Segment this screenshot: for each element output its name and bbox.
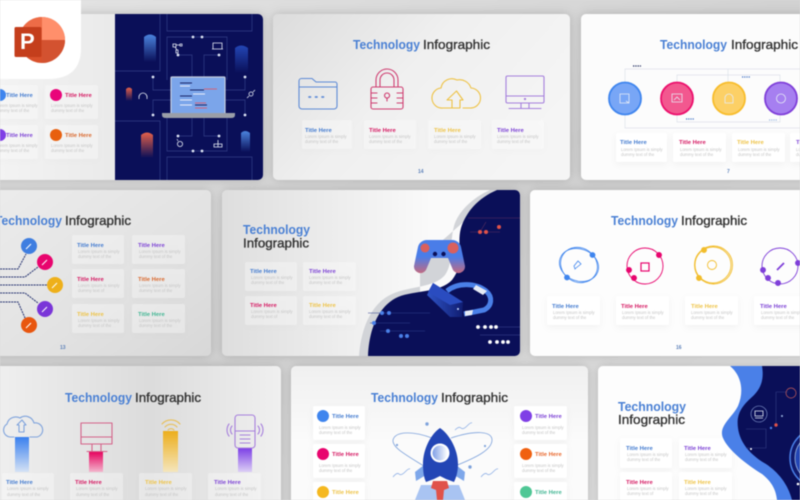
card: pink: dummy text of: [78, 288, 105, 293]
icon: yellow orbit: [694, 246, 732, 284]
title: Technology: [243, 222, 311, 237]
icon: blue orbit: [554, 240, 604, 290]
card: blue: [72, 235, 124, 264]
card: folder: Title Here: [305, 128, 332, 134]
card: padlock: Lorem Ipsum is simply: [369, 134, 412, 139]
card: green: [514, 482, 567, 500]
card: pink: dummy text of: [251, 314, 278, 319]
card: title 1: [0, 85, 39, 119]
card: blue: [547, 296, 600, 325]
card: pink: Lorem Ipsum is simply: [78, 283, 121, 288]
panel: rocket slide: [291, 366, 588, 500]
title: Technology: [611, 213, 679, 228]
navy wave shape: [359, 190, 520, 356]
title: Technology: [618, 399, 687, 414]
card: folder: Lorem Ipsum is simply: [305, 134, 348, 139]
card: orange: dummy text of the: [522, 468, 556, 473]
card: pink: [72, 269, 124, 298]
card: purple: [679, 438, 732, 468]
card: blue: Lorem Ipsum is simply: [553, 310, 596, 315]
card: blue: Title Here: [620, 140, 647, 146]
dashed connectors: [0, 254, 47, 318]
card: yellow: dummy text of the: [685, 491, 719, 496]
card: yellow: [72, 304, 124, 333]
card: yellow: dummy text of the: [691, 315, 725, 320]
card: blue: Title Here: [552, 304, 579, 310]
card: pink: Lorem Ipsum is simply: [319, 463, 362, 468]
card: pink: Lorem Ipsum is simply: [251, 309, 294, 314]
title: Technology: [660, 37, 728, 52]
card: title 3: [0, 125, 39, 159]
card: pink: Title Here: [75, 480, 102, 486]
card: teal: Lorem Ipsum is simply: [139, 318, 182, 323]
card: orange: Title Here: [138, 277, 165, 283]
card: pink: dummy text of: [627, 491, 654, 496]
card: blue: dummy text of the: [621, 152, 655, 157]
page number: 16: [676, 345, 682, 351]
title: Infographic: [135, 390, 202, 405]
card: yellow: Lorem Ipsum is simply: [78, 318, 121, 323]
card: purple: dummy text of the: [309, 280, 343, 285]
laptop: [162, 77, 235, 118]
card: yellow: [313, 482, 365, 500]
card: pink: Lorem Ipsum is simply: [622, 310, 665, 315]
title: [660, 37, 799, 52]
card: pink: Title Here: [621, 304, 648, 310]
card: pink: Title Here: [626, 480, 653, 486]
icon: folder: [299, 78, 337, 109]
card: title 2: Lorem Ipsum is simply: [51, 103, 94, 108]
rocket illustration: [393, 422, 498, 500]
card: blue: dummy text of the: [7, 492, 41, 497]
card: yellow: Lorem Ipsum is simply: [691, 310, 734, 315]
card: pink: Title Here: [250, 303, 277, 309]
card: title 1: Title Here: [6, 93, 33, 99]
card: yellow: [139, 473, 192, 500]
card: yellow: [303, 296, 356, 325]
card: purple: Title Here: [684, 446, 711, 452]
card: purple: dummy text of the: [522, 430, 556, 435]
card: orange: Lorem Ipsum is simply: [522, 463, 565, 468]
card: title 4: dummy text of the: [51, 148, 85, 153]
icon: pink orbit: [626, 248, 663, 284]
card: blue: [620, 438, 672, 468]
card: orange: dummy text of the: [139, 288, 173, 293]
card: yellow: Title Here: [691, 304, 718, 310]
card: purple: Lorem Ipsum is simply: [309, 275, 352, 280]
card: purple: Lorem Ipsum is simply: [685, 452, 728, 457]
panel: laptop slide: [0, 14, 263, 180]
card: yellow: [685, 296, 738, 325]
column: pink monitor: [81, 423, 112, 472]
card: blue: [313, 406, 365, 440]
card: pink: Lorem Ipsum is simply: [680, 147, 723, 152]
title: Infographic: [441, 390, 509, 405]
title: [618, 399, 687, 427]
title: [0, 213, 132, 228]
card: pink: Lorem Ipsum is simply: [76, 486, 119, 491]
card: pink: [620, 472, 672, 500]
card: purple: [514, 406, 567, 440]
title: [243, 222, 311, 250]
card: yellow: Title Here: [684, 480, 711, 486]
card: yellow: dummy text of the: [78, 323, 112, 328]
card: purple: Lorem Ipsum is simply: [139, 249, 182, 254]
card: purple: Title Here: [138, 243, 165, 249]
card: title 3: Title Here: [6, 133, 33, 139]
card: blue: [616, 133, 667, 162]
card: pink: [313, 444, 365, 478]
card: teal: [132, 304, 185, 333]
panel: security icons slide: [273, 14, 570, 180]
blue and navy wave: [722, 366, 800, 500]
card: orange: Title Here: [535, 452, 562, 458]
card: blue: [245, 262, 297, 291]
card: monitor: [492, 120, 544, 149]
page number: 7: [727, 169, 730, 175]
panel: device columns slide: [0, 366, 281, 500]
card: cloud: Title Here: [434, 128, 461, 134]
card: purple: Title Here: [535, 414, 562, 420]
card: blue: dummy text of the: [251, 280, 285, 285]
navy circuit area: [115, 14, 263, 180]
panel: orbit circles slide: [530, 190, 800, 356]
card: yellow: Lorem Ipsum is simply: [738, 147, 781, 152]
icon: cloud upload: [432, 79, 481, 108]
card: pink: [70, 473, 123, 500]
card: yellow: Lorem Ipsum is simply: [145, 486, 188, 491]
icon: game controller: [414, 240, 465, 273]
connector lines: [625, 66, 800, 128]
card: purple: Lorem Ipsum is simply: [215, 486, 258, 491]
card: yellow: [679, 472, 732, 500]
node: yellow: [713, 82, 745, 114]
column: blue cloud: [4, 416, 43, 472]
PowerPoint logo badge: P: [20, 29, 35, 54]
title: [353, 37, 491, 52]
card: yellow: dummy text of the: [145, 492, 179, 497]
icon: VR headset: [427, 283, 491, 317]
panel: dashed connector slide: [0, 190, 211, 356]
title: [371, 390, 509, 405]
card: title 2: dummy text of the: [51, 108, 85, 113]
card: title 4: [45, 125, 98, 159]
card: purple: Lorem Ipsum is simply: [522, 425, 565, 430]
title: Technology: [65, 390, 133, 405]
card: pink: [673, 133, 726, 162]
card: orange: [132, 269, 185, 298]
card: title 4: Title Here: [65, 133, 92, 139]
glowing cylinders: [126, 34, 250, 158]
card: yellow: dummy text of the: [309, 314, 343, 319]
card: blue: [2, 473, 54, 500]
card: title 2: Title Here: [65, 93, 92, 99]
card: yellow: dummy text of the: [738, 152, 772, 157]
card: yellow: Lorem Ipsum is simply: [309, 309, 352, 314]
card: blue: Lorem Ipsum is simply: [319, 425, 362, 430]
card: blue: Lorem Ipsum is simply: [251, 275, 294, 280]
icon: monitor: [506, 76, 544, 108]
card: purple: [790, 133, 800, 162]
title: [611, 213, 748, 228]
card: teal: Title Here: [138, 312, 165, 318]
title: Infographic: [423, 37, 491, 52]
card: blue: Title Here: [332, 414, 359, 420]
title: [65, 390, 202, 405]
card: padlock: [364, 120, 416, 149]
card: blue: Lorem Ipsum is simply: [621, 147, 664, 152]
page number: 13: [60, 345, 66, 351]
card: purple: dummy text of the: [685, 457, 719, 462]
card: pink: Title Here: [332, 452, 359, 458]
card: yellow: Title Here: [145, 480, 172, 486]
card: yellow: Lorem Ipsum is simply: [685, 486, 728, 491]
card: purple: [208, 473, 261, 500]
panel: circle process slide: [581, 14, 800, 180]
card: purple: dummy text of the: [215, 492, 249, 497]
card: monitor: dummy text of the: [497, 139, 531, 144]
PowerPoint logo badge: [0, 0, 81, 79]
card: orange: Lorem Ipsum is simply: [139, 283, 182, 288]
title: Technology: [353, 37, 421, 52]
card: pink: dummy text of the: [622, 315, 656, 320]
card: yellow: [732, 133, 785, 162]
card: pink: dummy text of the: [680, 152, 714, 157]
card: blue: dummy text of the: [553, 315, 587, 320]
card: folder: dummy text of the: [305, 139, 339, 144]
card: title 2: [45, 85, 98, 119]
card: blue: Title Here: [6, 480, 33, 486]
card: cloud: dummy text of the: [434, 139, 468, 144]
card: blue: Title Here: [250, 269, 277, 275]
card: blue: dummy text of the: [627, 457, 661, 462]
card: pink: [616, 296, 669, 325]
card: folder: [302, 120, 352, 149]
title: Infographic: [681, 213, 748, 228]
card: pink: [245, 296, 297, 325]
card: blue: dummy text of the: [78, 254, 112, 259]
card: pink: dummy text of the: [319, 468, 353, 473]
card: padlock: dummy text of the: [369, 139, 403, 144]
card: blue: dummy text of the: [319, 430, 353, 435]
column: yellow wifi: [162, 420, 180, 472]
card: blue: Lorem Ipsum is simply: [7, 486, 50, 491]
icon: purple orbit: [760, 248, 800, 286]
title: Infographic: [618, 412, 686, 427]
icon: padlock: [371, 69, 403, 109]
card: cloud: Lorem Ipsum is simply: [434, 134, 477, 139]
panel: gaming and VR slide: [222, 190, 520, 356]
card: purple: [303, 262, 356, 291]
circuit icons: [139, 43, 255, 147]
card: monitor: Lorem Ipsum is simply: [497, 134, 540, 139]
card: pink: Title Here: [679, 140, 706, 146]
card: pink: Title Here: [77, 277, 104, 283]
card: yellow: Title Here: [77, 312, 104, 318]
card: blue: Lorem Ipsum is simply: [78, 249, 121, 254]
title: Infographic: [65, 213, 132, 228]
node: purple: [765, 82, 797, 114]
card: purple: [754, 296, 800, 325]
page number: 14: [418, 169, 424, 175]
card: purple: dummy text of the: [761, 315, 795, 320]
title: Infographic: [243, 236, 310, 250]
card: orange: [514, 444, 567, 478]
card: yellow: Title Here: [332, 490, 359, 496]
title: Technology: [371, 390, 439, 405]
card: monitor: Title Here: [497, 128, 524, 134]
card: pink: Lorem Ipsum is simply: [627, 486, 670, 491]
node icons: [21, 238, 63, 333]
card: yellow: Title Here: [309, 303, 336, 309]
card: purple: Title Here: [760, 304, 787, 310]
card: title 4: Lorem Ipsum is simply: [51, 143, 94, 148]
card: purple: Title Here: [309, 269, 336, 275]
card: blue: Title Here: [626, 446, 653, 452]
card: blue: Title Here: [77, 243, 104, 249]
card: teal: dummy text of the: [139, 323, 173, 328]
card: purple: [132, 235, 185, 264]
column: purple phone: [227, 415, 263, 472]
card: cloud: [428, 120, 481, 149]
panel: blue wave slide: [598, 366, 800, 500]
card: blue: Lorem Ipsum is simply: [627, 452, 670, 457]
node: pink: [661, 82, 693, 114]
node: blue: [609, 82, 641, 114]
card: padlock: Title Here: [369, 128, 396, 134]
card: pink: dummy text of the: [76, 492, 110, 497]
card: purple: Title Here: [214, 480, 241, 486]
title: Infographic: [731, 37, 799, 52]
card: purple: dummy text of the: [139, 254, 173, 259]
card: yellow: Title Here: [737, 140, 764, 146]
card: green: Title Here: [535, 490, 562, 496]
